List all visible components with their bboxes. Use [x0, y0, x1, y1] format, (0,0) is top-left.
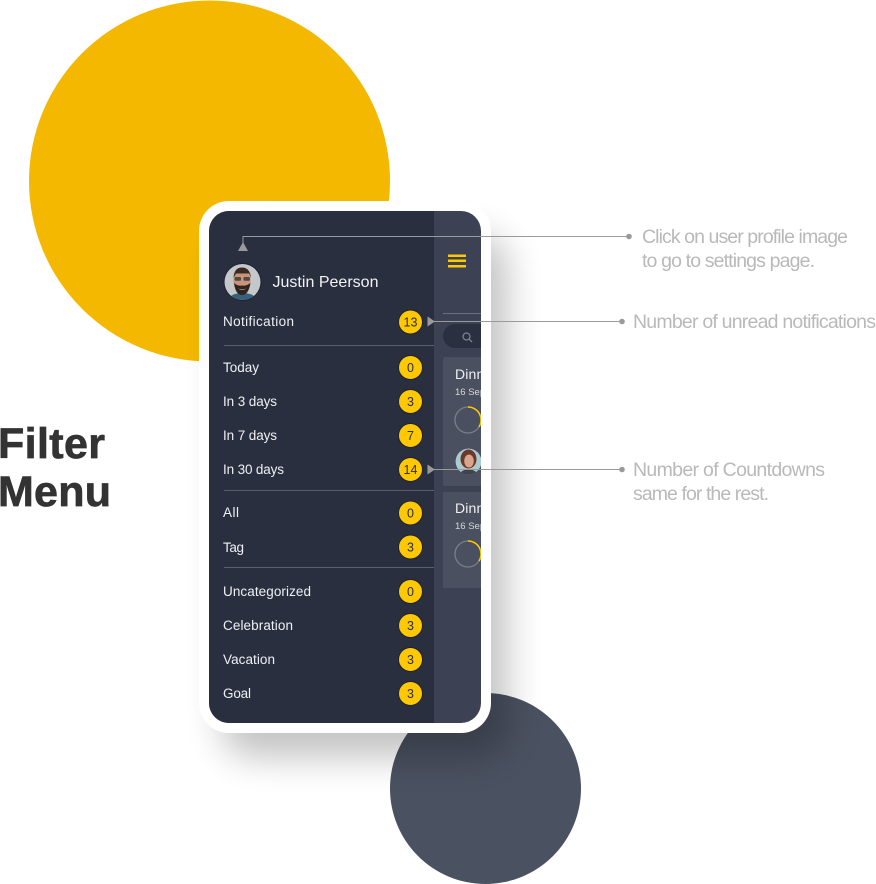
menu row: Vacation: 3 — [407, 653, 414, 667]
menu row: Today: Today — [223, 360, 259, 375]
menu row: Today: 0 — [407, 361, 414, 375]
menu row: All — [223, 501, 422, 525]
card 2: 16 Sep — [455, 521, 485, 532]
callout text: countdowns: Number of Countdowns — [633, 459, 825, 481]
menu row: Notification: 13 — [404, 316, 417, 330]
callout text: countdowns — [633, 459, 825, 505]
card 2 — [443, 492, 481, 588]
avatar: Justin Peerson — [224, 263, 262, 301]
callout arrow: profile image — [238, 234, 632, 251]
yellow circle — [29, 0, 390, 362]
heading: Filter Menu: Filter — [0, 420, 105, 468]
callout text: profile image: to go to settings page. — [642, 250, 815, 272]
menu row: In 3 days: In 3 days — [223, 394, 277, 409]
callout text: countdowns: same for the rest. — [633, 483, 769, 505]
menu row: Celebration — [223, 614, 422, 638]
menu row: All: 0 — [407, 506, 414, 520]
menu row: In 30 days: In 30 days — [223, 462, 284, 477]
menu row: Tag — [223, 535, 422, 559]
menu row: In 7 days: In 7 days — [223, 428, 277, 443]
avatar: woman — [456, 448, 481, 474]
card 1: 16 Sep — [455, 387, 485, 398]
menu row: In 30 days: 14 — [404, 463, 417, 477]
card 1 — [443, 357, 481, 486]
menu row: All: All — [223, 505, 239, 520]
callout arrow: notifications — [428, 316, 625, 326]
phone shadow — [222, 235, 507, 757]
callout text: notifications: Number of unread notifications — [633, 311, 876, 333]
menu row: Celebration: Celebration — [223, 618, 293, 633]
menu row: In 7 days — [223, 424, 422, 448]
menu row: Today — [223, 356, 422, 380]
screen — [209, 211, 503, 723]
menu row: In 7 days: 7 — [407, 429, 414, 443]
menu row: Uncategorized — [223, 580, 422, 604]
menu row: Notification: Notification — [223, 314, 294, 329]
heading: Filter Menu: Menu — [0, 468, 111, 516]
card 1: Dinner — [455, 366, 497, 382]
menu row: Tag: Tag — [223, 540, 244, 555]
menu row: Goal: Goal — [223, 686, 251, 701]
background content panel — [209, 211, 503, 723]
menu row: In 3 days — [223, 390, 422, 414]
menu row: Tag: 3 — [407, 540, 414, 554]
callout arrow: countdowns — [428, 464, 625, 474]
filter menu panel — [209, 211, 434, 723]
menu row: In 30 days — [223, 458, 422, 482]
user name: Justin Peerson — [272, 274, 378, 291]
icon: hamburger menu — [448, 254, 466, 268]
menu row: Uncategorized: Uncategorized — [223, 584, 311, 599]
menu row: Goal — [223, 682, 422, 706]
menu row: In 3 days: 3 — [407, 395, 414, 409]
search bar — [443, 324, 481, 348]
phone — [199, 201, 503, 733]
dark grey circle — [390, 693, 581, 884]
card 2: Dinner — [455, 500, 497, 516]
menu row: Goal: 3 — [407, 687, 414, 701]
callout text: profile image — [642, 226, 848, 272]
menu row: Celebration: 3 — [407, 619, 414, 633]
menu row: Notification — [223, 310, 422, 334]
callout text: profile image: Click on user profile image — [642, 226, 848, 248]
menu row: Uncategorized: 0 — [407, 585, 414, 599]
menu row: Vacation: Vacation — [223, 652, 275, 667]
menu row: Vacation — [223, 648, 422, 672]
heading: Filter Menu — [0, 420, 111, 516]
phone frame — [199, 201, 491, 733]
